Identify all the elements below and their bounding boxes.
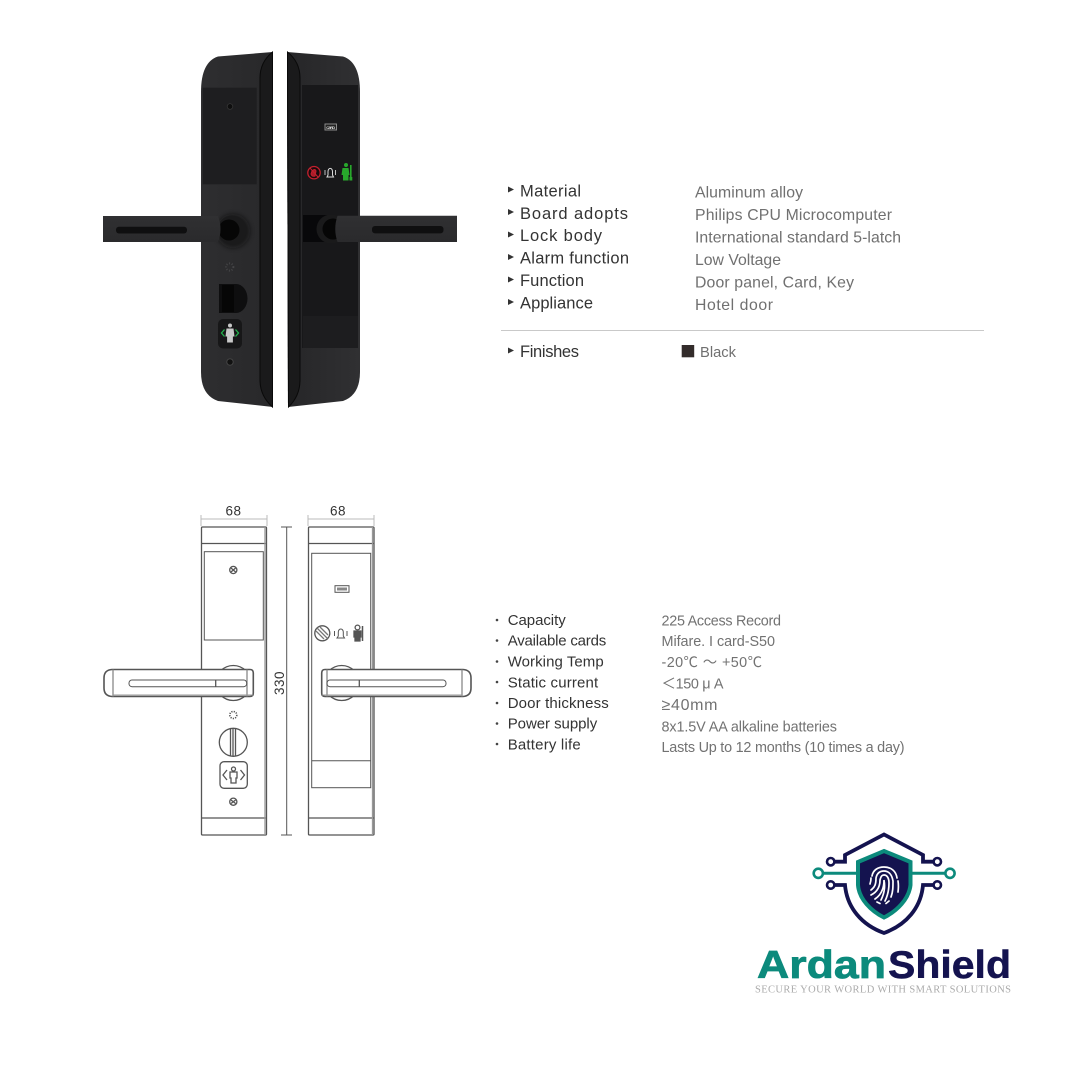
row: power supply (496, 716, 837, 736)
width dimension left: 68 (201, 504, 267, 526)
row: appliance (508, 294, 773, 314)
row: available cards (496, 633, 775, 650)
left lever handle (103, 214, 250, 248)
right lock panel (287, 52, 360, 407)
row: working temp: Working Temp (508, 654, 604, 670)
row: finishes with black swatch: Black (700, 345, 737, 361)
back panel outline (308, 527, 374, 835)
row: lock body: Lock body (520, 227, 603, 245)
width dimension right: 68: 68 (330, 504, 346, 518)
row: power supply: Power supply (508, 716, 598, 733)
width dimension left: 68: 68 (225, 504, 242, 518)
product photo: black door lock, front and back panels (103, 52, 457, 407)
back lever outline (322, 666, 471, 700)
row: static current: Static current (508, 674, 599, 692)
row: door thickness: ≥40mm (662, 697, 718, 714)
logo: ArdanShield: Shield (888, 944, 1011, 987)
row: working temp (496, 654, 762, 671)
row: working temp: -20℃ ～ +50℃ (662, 655, 762, 671)
logo: ArdanShield (755, 834, 1011, 996)
row: power supply: 8x1.5V AA alkaline batteries (662, 720, 837, 736)
row: finishes with black swatch: Finishes (520, 343, 579, 361)
right lock panel: CARD (326, 125, 335, 130)
height dimension: 330: 330 (272, 671, 287, 695)
row: battery life (496, 736, 904, 756)
row: material (508, 182, 803, 202)
row: alarm function (508, 250, 781, 269)
specification table: electrical and usage (496, 612, 904, 756)
technical drawing: lock dimensions (104, 504, 471, 835)
row: door thickness: Door thickness (508, 695, 609, 712)
row: alarm function: Low Voltage (695, 252, 781, 269)
row: battery life: Lasts Up to 12 months (10 times a day) (662, 740, 904, 756)
row: capacity: Capacity (508, 612, 566, 629)
row: function: Function (520, 272, 584, 290)
row: material: Material (520, 182, 581, 200)
row: appliance: Hotel door (695, 297, 773, 314)
tagline: SECURE YOUR WORLD WITH SMART SOLUTIONS (755, 984, 1011, 996)
right lever handle (303, 214, 457, 244)
row: capacity (496, 612, 781, 630)
row: board adopts: Philips CPU Microcomputer (695, 207, 892, 224)
width dimension right: 68 (308, 504, 374, 526)
left lock panel (201, 52, 273, 407)
row: board adopts (508, 205, 892, 224)
row: lock body: International standard 5-latch (695, 230, 901, 246)
row: material: Aluminum alloy (695, 184, 803, 202)
row: appliance: Appliance (520, 294, 593, 312)
row: static current: ＜150 μ A (662, 676, 724, 692)
row: available cards: Available cards (508, 633, 606, 650)
wordmark: Ardan (757, 944, 886, 987)
row: lock body (508, 227, 901, 246)
front lever outline (104, 666, 253, 700)
row: function: Door panel, Card, Key (695, 274, 854, 292)
row: available cards: Mifare. I card-S50 (662, 634, 775, 650)
row: door thickness (496, 695, 718, 714)
row: alarm function: Alarm function (520, 250, 629, 268)
front panel outline (202, 527, 266, 835)
row: capacity: 225 Access Record (662, 614, 781, 630)
row: board adopts: Board adopts (520, 205, 628, 223)
icon: circuit shield with fingerprint (814, 834, 955, 933)
row: function (508, 272, 854, 292)
row: static current (496, 674, 724, 692)
row: finishes with black swatch (508, 343, 737, 361)
row: battery life: Battery life (508, 736, 581, 753)
specification table: main features (508, 182, 901, 314)
